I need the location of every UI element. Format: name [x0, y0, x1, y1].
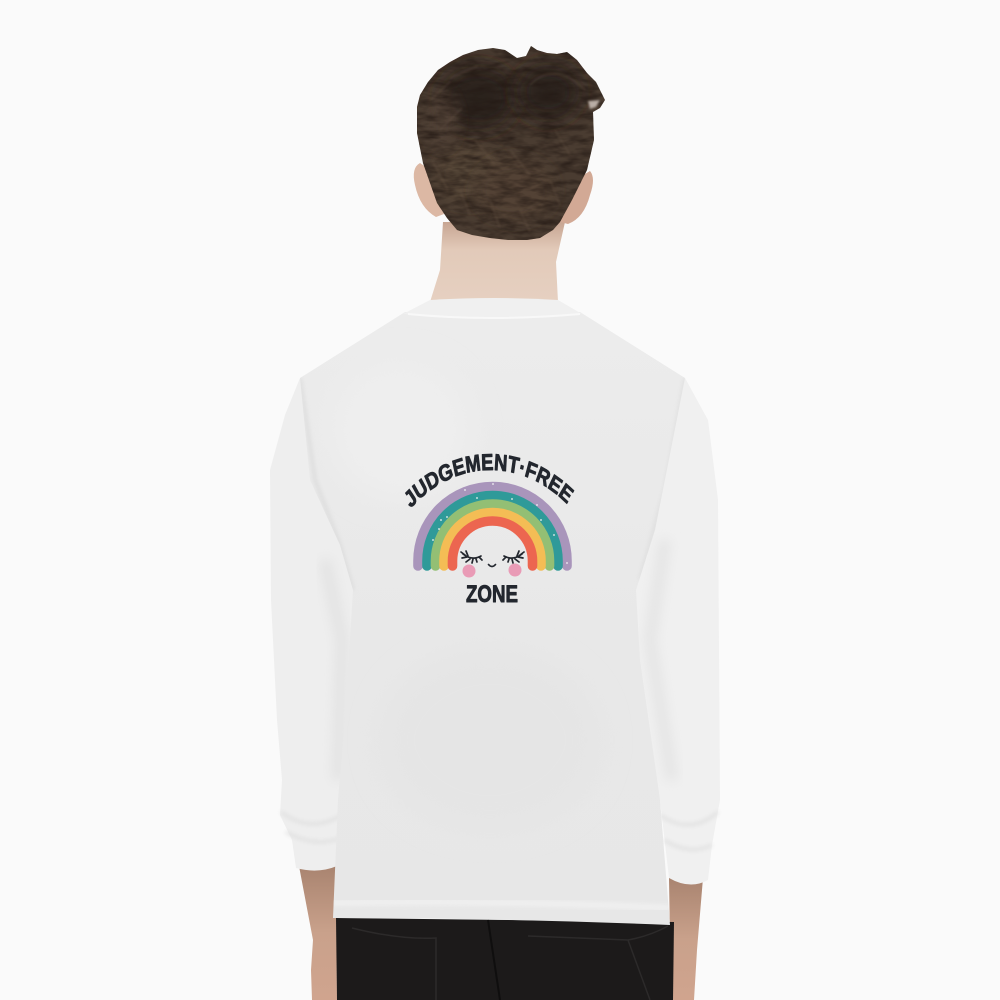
collar: [403, 298, 582, 318]
left ear: [414, 163, 444, 217]
neck: [430, 222, 565, 302]
right sleeve: [625, 378, 720, 885]
right cheek: [508, 564, 522, 576]
hair: [417, 46, 605, 240]
right ear: [560, 171, 593, 224]
word ZONE: ZONE: [466, 581, 518, 608]
left sleeve: [270, 378, 370, 871]
rainbow bands: [418, 486, 567, 566]
trousers: [336, 918, 674, 1000]
left forearm: [299, 866, 337, 1000]
back print: rainbow graphic: [405, 454, 574, 608]
left cheek: [462, 564, 476, 578]
product photo: [270, 46, 720, 1000]
left closed eye: [461, 551, 482, 563]
right forearm: [669, 878, 703, 1000]
smile: [488, 564, 496, 566]
rainbow sparkles: [432, 483, 568, 564]
shirt body: [300, 312, 685, 925]
curved heading: JUDGEMENT·FREE: [405, 454, 574, 507]
right closed eye: [503, 551, 524, 563]
